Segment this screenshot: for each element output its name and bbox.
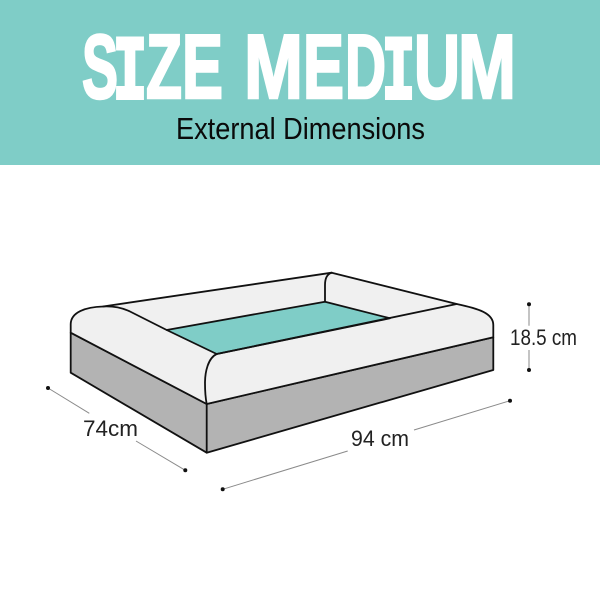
title: E [303, 17, 344, 118]
dimension: length 94 cm: 94 cm [351, 426, 409, 451]
bed base [71, 333, 493, 453]
title [82, 17, 516, 126]
title: S [82, 17, 118, 118]
dimension: length 94 cm [221, 399, 512, 491]
dimension: width 74 cm: 74cm [83, 416, 138, 441]
bed illustration [71, 273, 493, 453]
title: E [182, 17, 223, 118]
title: I [113, 24, 147, 126]
bolster cushion [71, 273, 493, 404]
dimension: width 74 cm [46, 386, 187, 472]
subtitle: External Dimensions [176, 111, 425, 146]
title: M [458, 17, 516, 118]
title: U [414, 17, 460, 118]
teal sleeping surface [167, 302, 390, 354]
title: Z [146, 17, 182, 118]
header banner [0, 0, 600, 165]
bolster seams [103, 273, 457, 404]
dimension: height 18.5 cm [510, 302, 577, 372]
title: D [345, 17, 386, 118]
title: M [244, 17, 303, 118]
dimension: height 18.5 cm: 18.5 cm [510, 325, 577, 350]
title: I [382, 24, 415, 126]
